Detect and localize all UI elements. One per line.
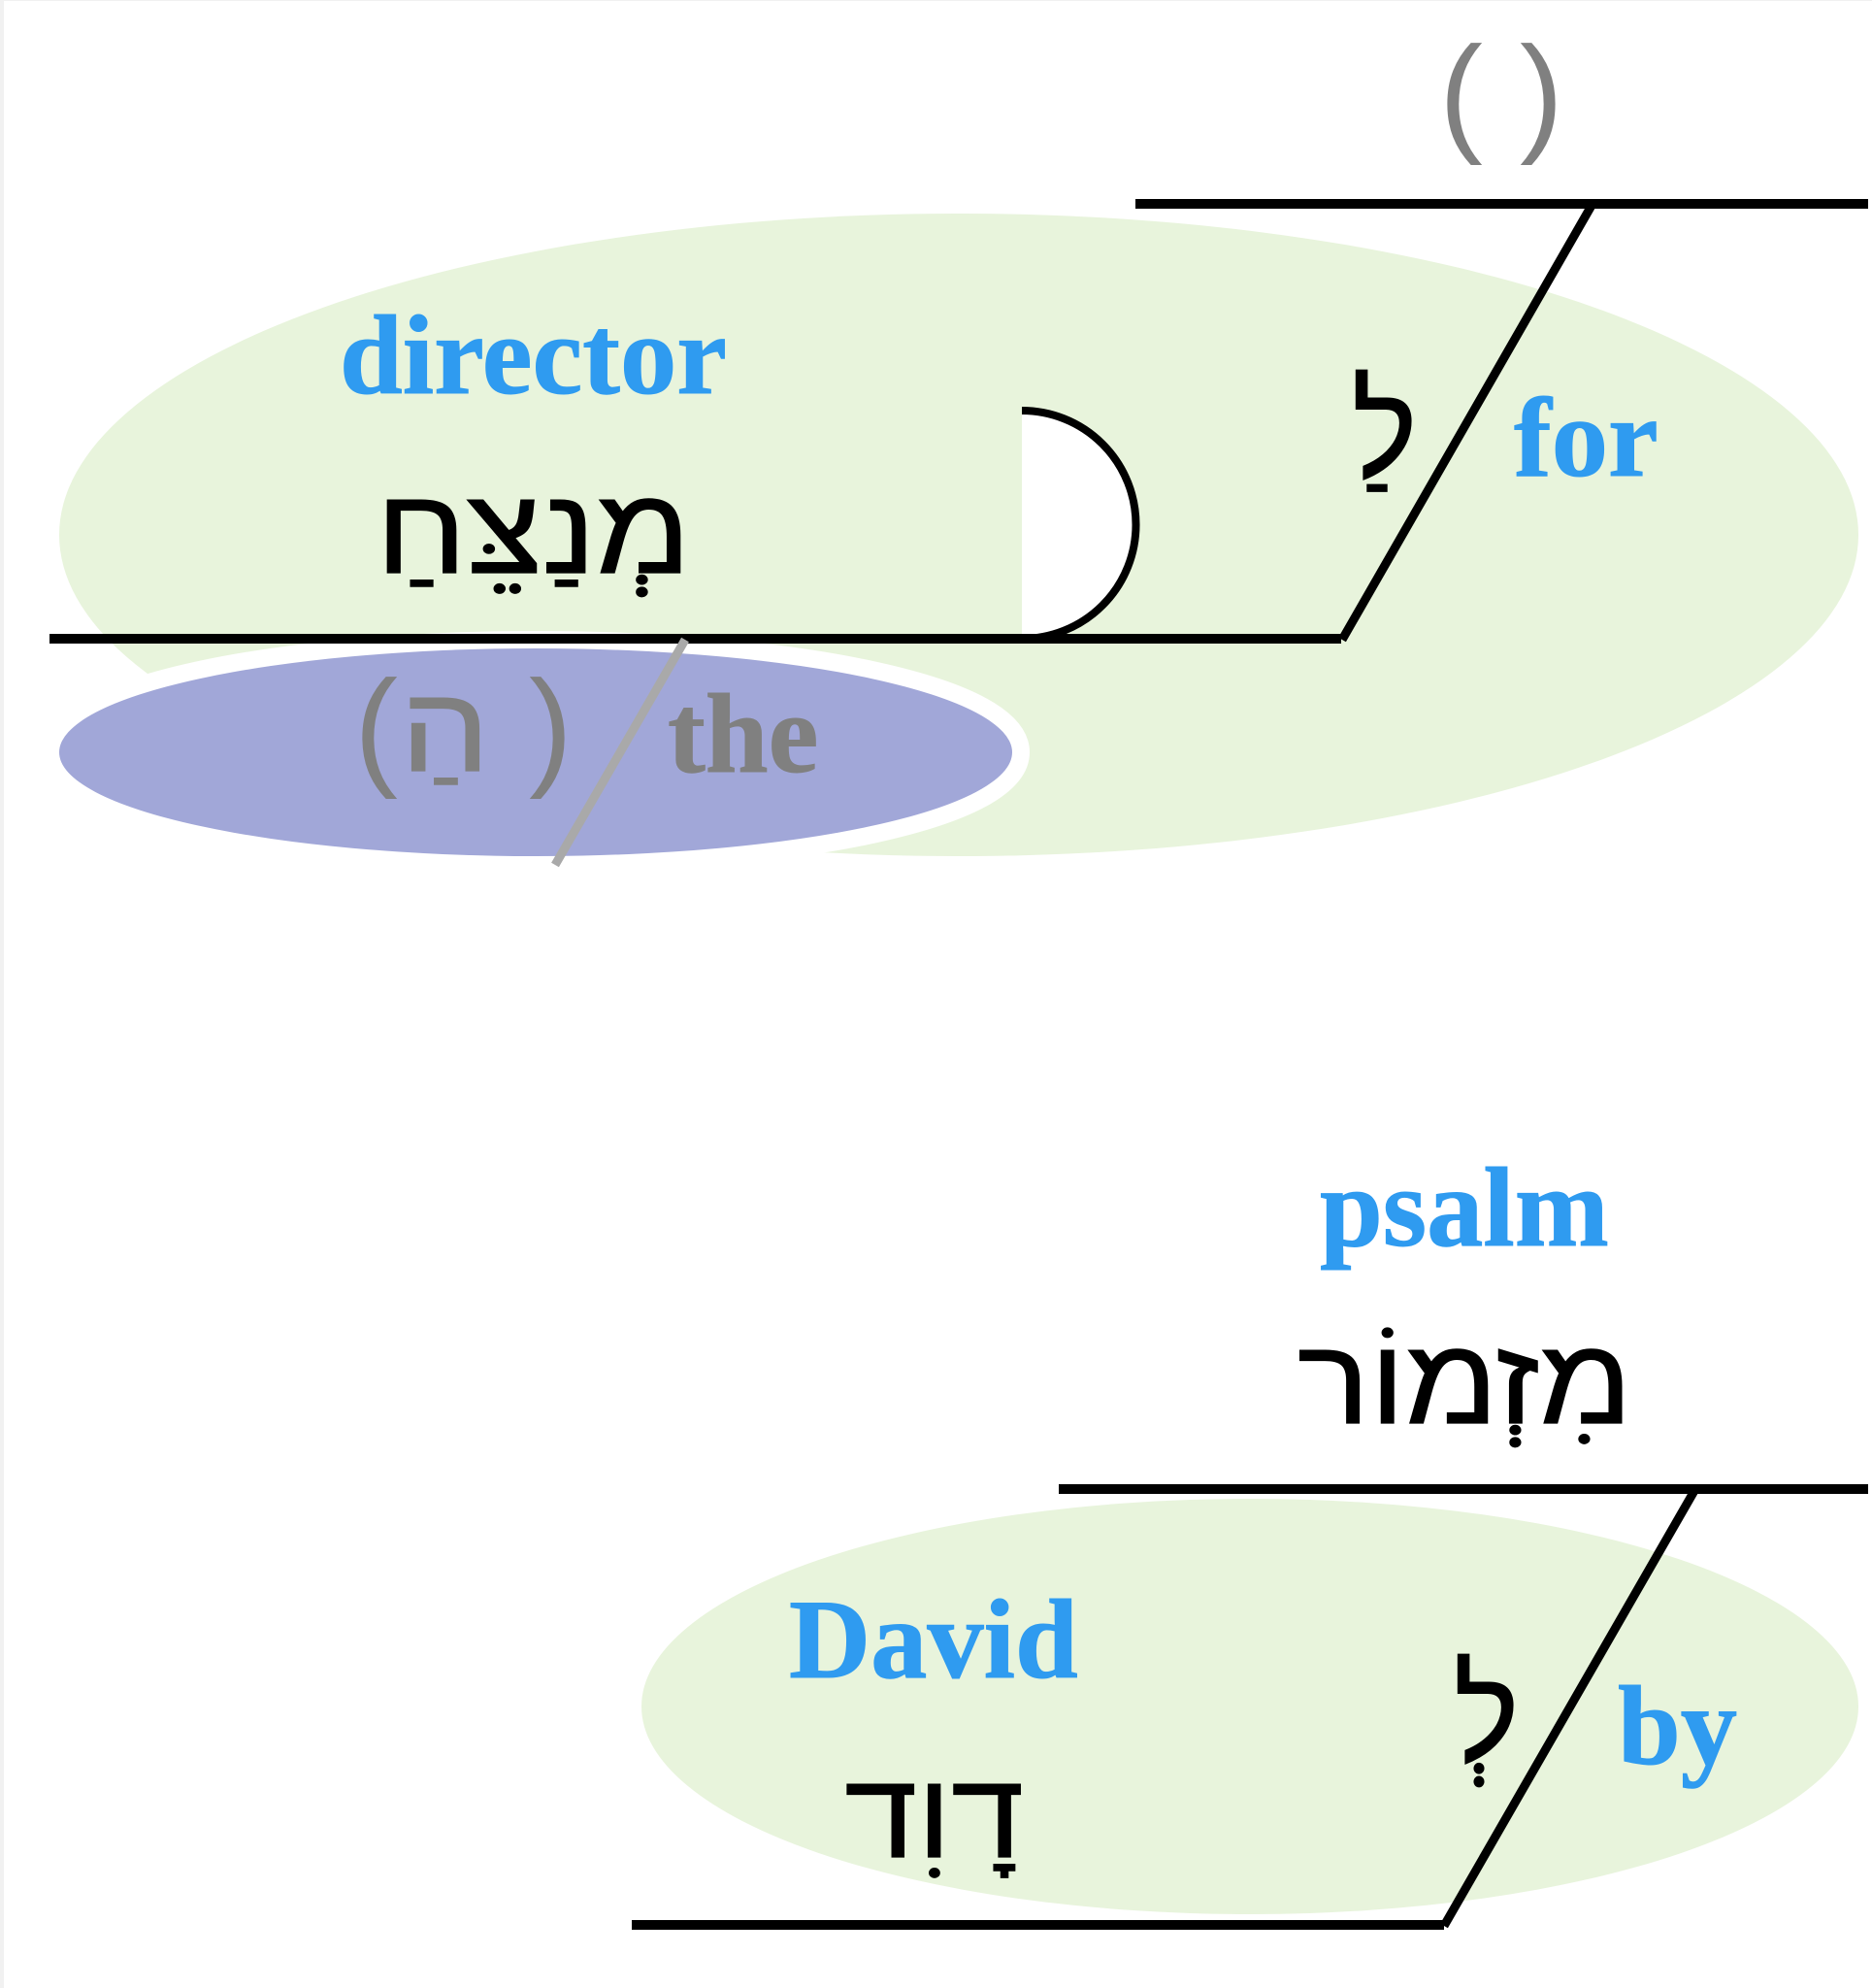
label: David: David: [789, 1577, 1078, 1703]
hebrew: article ha in parentheses: הַ: [400, 661, 490, 797]
label: by: by: [1618, 1664, 1737, 1789]
baseline: upper main line: [1135, 199, 1868, 209]
hebrew: David: דָוִד: [844, 1747, 1024, 1883]
slanted line: preposition: [1342, 204, 1593, 640]
purple ellipse: article highlight with white halo: [59, 648, 1012, 856]
parentheses: implied element: [1439, 19, 1563, 166]
arc: construct marker outline: [1022, 411, 1135, 639]
hebrew: preposition le: לְ: [1454, 1642, 1519, 1789]
hebrew: menatseach: מְנַצֵּחַ: [376, 464, 691, 599]
panel: lower diagram: [632, 1145, 1868, 1926]
slanted line: article: [555, 640, 685, 865]
parentheses: implied element: ): [1520, 19, 1563, 166]
parentheses: implied element: (: [1439, 19, 1483, 166]
label: psalm: psalm: [1320, 1145, 1609, 1271]
baseline: lower object line: [632, 1920, 1444, 1930]
hebrew: article ha in parentheses: ): [529, 653, 573, 800]
label: for: for: [1514, 376, 1659, 501]
hebrew: preposition la: לַ: [1352, 358, 1417, 505]
hebrew: article ha in parentheses: [354, 653, 573, 800]
baseline: upper object line: [49, 634, 1341, 644]
baseline: lower main line: [1059, 1484, 1868, 1494]
hebrew: mizmor: מִזְמוֹר: [1297, 1314, 1632, 1449]
label: the: the: [668, 672, 818, 797]
label: director: director: [340, 293, 727, 418]
panel: upper diagram: [49, 19, 1868, 865]
green ellipse: upper phrase highlight: [59, 214, 1858, 856]
white half-circle: construct marker: [1022, 411, 1135, 639]
hebrew: article ha in parentheses: (: [354, 653, 398, 800]
slanted line: preposition: [1444, 1489, 1695, 1926]
green ellipse: lower phrase highlight: [641, 1499, 1858, 1914]
